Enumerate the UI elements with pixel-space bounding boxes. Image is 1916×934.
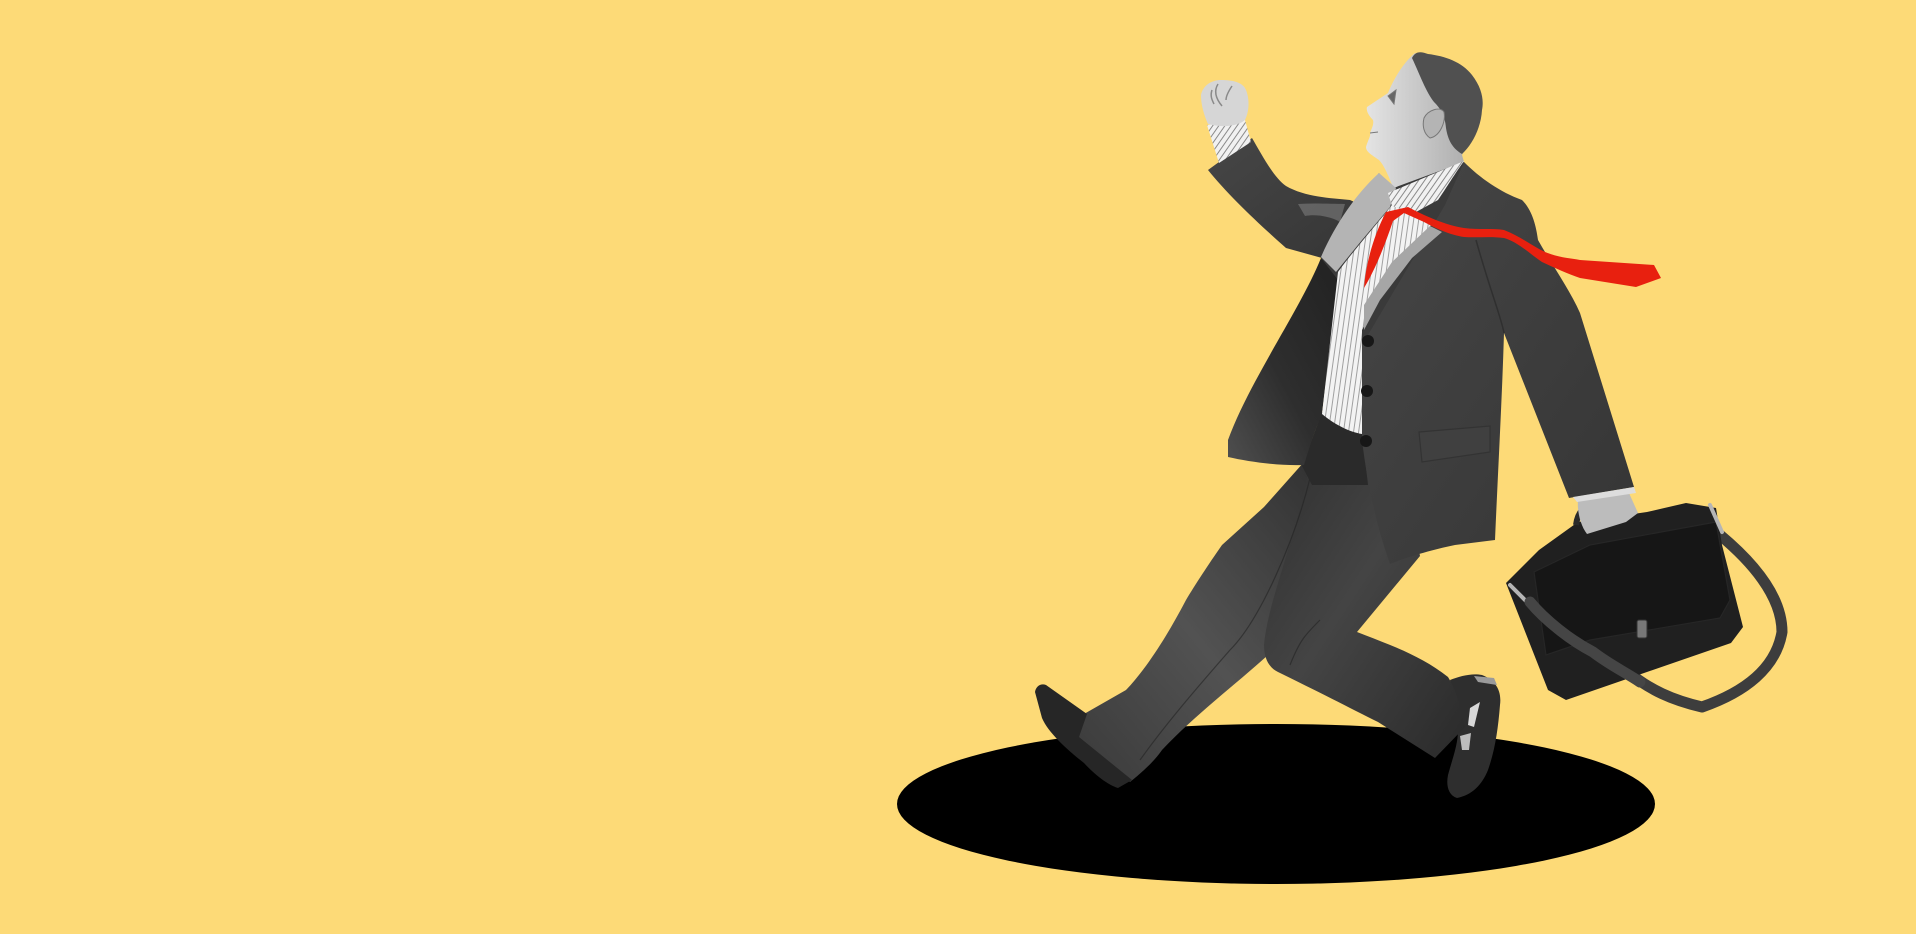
shirt front: [1322, 205, 1432, 434]
black hole ellipse: [897, 724, 1655, 884]
rear leg with trousers: [1078, 462, 1340, 782]
handle: [1576, 505, 1594, 525]
clasp: [1637, 620, 1647, 638]
raised arm sleeve: [1208, 138, 1372, 258]
waist area under shirt: [1302, 412, 1368, 485]
strap clips: [1510, 505, 1722, 605]
fist: [1201, 80, 1249, 126]
front shoe: [1447, 674, 1500, 798]
flap: [1534, 522, 1730, 655]
arm highlight: [1298, 204, 1345, 222]
tie: [1364, 207, 1661, 288]
ear: [1423, 109, 1444, 138]
front leg with trousers: [1264, 450, 1465, 758]
sleeve cuff lower: [1573, 487, 1636, 502]
left lapel: [1321, 173, 1396, 272]
shirt cuff raised arm: [1207, 120, 1251, 163]
briefcase: [1506, 503, 1743, 700]
trouser crease and seams: [1140, 478, 1320, 760]
shoe laces and white detail: [1460, 676, 1497, 750]
hand holding briefcase: [1578, 493, 1638, 534]
neck and head skin: [1366, 53, 1478, 198]
jacket pocket: [1419, 426, 1490, 462]
rear shoe: [1035, 684, 1132, 788]
briefcase strap (behind case): [1628, 535, 1782, 707]
jacket buttons: [1360, 335, 1374, 447]
collar: [1388, 161, 1464, 212]
eye and mouth: [1370, 90, 1396, 133]
sleeve seam: [1476, 240, 1504, 333]
jacket left panel: [1228, 258, 1338, 465]
hair: [1412, 52, 1483, 154]
finger lines: [1211, 84, 1232, 106]
torso backing behind shirt and lapels: [1321, 162, 1464, 345]
right lapel: [1364, 226, 1442, 330]
jacket body main: [1362, 162, 1634, 564]
strap over case front: [1530, 602, 1640, 682]
